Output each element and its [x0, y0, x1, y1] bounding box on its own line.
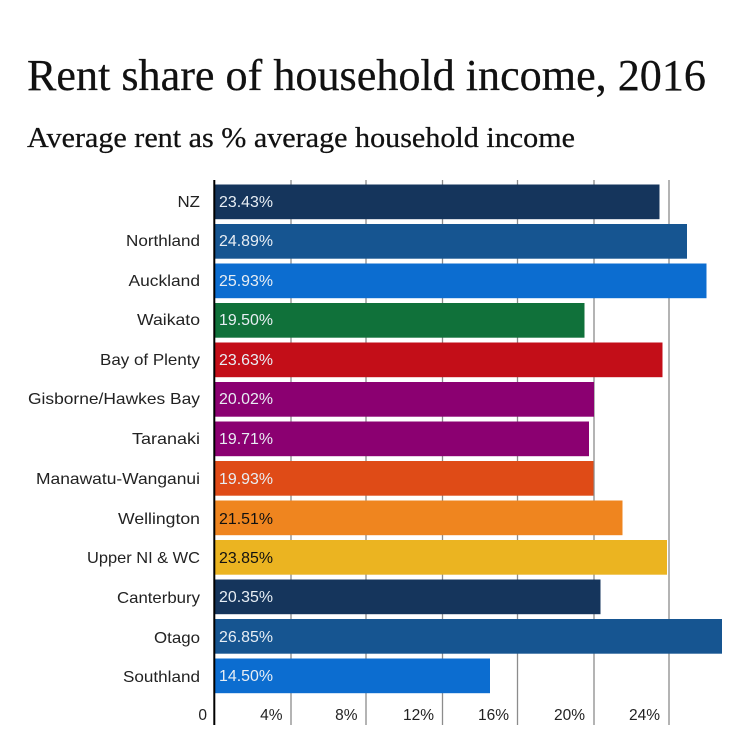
bar: Upper NI & WC: Upper NI & WC	[87, 550, 200, 567]
gridlines	[291, 180, 669, 725]
bar: Auckland	[128, 264, 706, 298]
bar: Upper NI & WC	[87, 540, 667, 575]
bar: Gisborne/Hawkes Bay: 20.02%	[219, 391, 273, 408]
x-axis labels: 16%	[478, 707, 509, 724]
subtitle: Average rent as % average household income	[27, 123, 575, 154]
bar chart	[28, 180, 722, 725]
bar: Wellington	[118, 500, 622, 535]
bar: Southland: 14.50%	[219, 668, 273, 685]
bar: NZ	[178, 184, 660, 219]
bar: Manawatu-Wanganui: 19.93%	[219, 471, 273, 488]
bar: Bay of Plenty	[100, 342, 662, 377]
bar: Northland: 24.89%	[219, 233, 273, 250]
title: Rent share of household income, 2016	[27, 51, 706, 100]
bar: Bay of Plenty: Bay of Plenty	[100, 352, 200, 369]
axis line	[213, 180, 215, 725]
x-axis labels: 4%	[260, 707, 283, 724]
x-axis labels: 0	[198, 707, 207, 724]
bar: Gisborne/Hawkes Bay: Gisborne/Hawkes Bay	[28, 391, 200, 408]
bar: Taranaki: Taranaki	[132, 431, 200, 448]
bar: Taranaki	[132, 422, 589, 456]
bar: Auckland: Auckland	[128, 273, 200, 290]
x-axis labels: 24%	[629, 707, 660, 724]
bar: Gisborne/Hawkes Bay	[28, 382, 594, 417]
bar: Southland: Southland	[123, 669, 200, 686]
bar: Waikato: 19.50%	[219, 312, 273, 329]
x-axis labels: 12%	[403, 707, 434, 724]
bar: Otago: 26.85%	[219, 629, 273, 646]
bar: Canterbury	[117, 580, 600, 614]
bar: Otago: Otago	[154, 630, 200, 647]
bar: Northland	[126, 224, 687, 259]
bar: Waikato	[137, 303, 584, 338]
bar: Auckland: 25.93%	[219, 273, 273, 290]
x-axis labels: 8%	[335, 707, 358, 724]
bar: Wellington: Wellington	[118, 511, 200, 528]
bar: NZ: NZ	[178, 194, 200, 211]
bar: Canterbury: Canterbury	[117, 590, 200, 607]
bar: Canterbury: 20.35%	[219, 589, 273, 606]
bar: Otago	[154, 619, 722, 654]
x-axis labels: 20%	[554, 707, 585, 724]
bar: NZ: 23.43%	[219, 194, 273, 211]
bar: Manawatu-Wanganui	[36, 461, 594, 496]
bar: Manawatu-Wanganui: Manawatu-Wanganui	[36, 471, 200, 488]
bar: Southland	[123, 658, 490, 693]
bar: Bay of Plenty: 23.63%	[219, 352, 273, 369]
bar: Taranaki: 19.71%	[219, 431, 273, 448]
bar: Northland: Northland	[126, 233, 200, 250]
bar: Waikato: Waikato	[137, 312, 200, 329]
bar: Wellington: 21.51%	[219, 511, 273, 528]
bar: Upper NI & WC: 23.85%	[219, 550, 273, 567]
x-axis labels	[198, 707, 660, 724]
